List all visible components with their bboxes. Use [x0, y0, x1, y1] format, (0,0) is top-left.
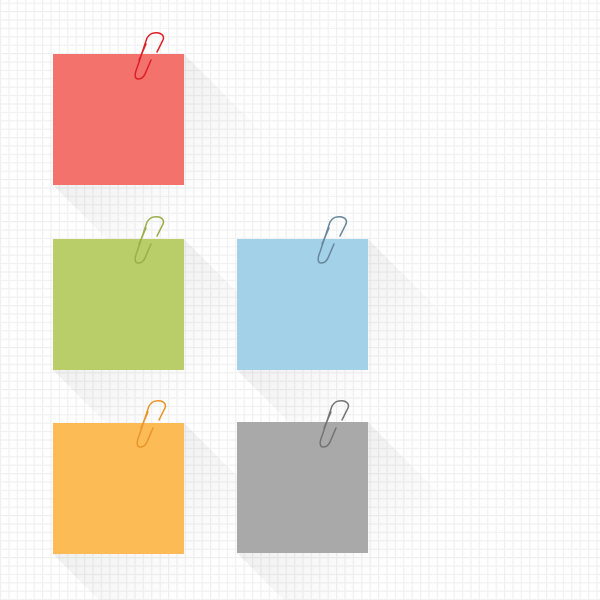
long shadow: red note — [53, 54, 294, 295]
panel: orange note — [53, 423, 184, 554]
panel: red note — [53, 54, 184, 185]
panel: green note — [53, 239, 184, 370]
icon: gray paper clip — [320, 401, 348, 447]
icon: orange paper clip — [137, 401, 165, 447]
panel: gray note — [237, 422, 368, 553]
long shadow: orange note — [53, 423, 294, 600]
icon: green paper clip — [135, 217, 163, 263]
long shadow: gray note — [237, 422, 478, 600]
panel: blue note — [237, 239, 368, 370]
long shadow: green note — [53, 239, 294, 480]
icon: red paper clip — [135, 33, 163, 79]
long shadow: blue note — [237, 239, 478, 480]
icon: blue paper clip — [318, 217, 346, 263]
